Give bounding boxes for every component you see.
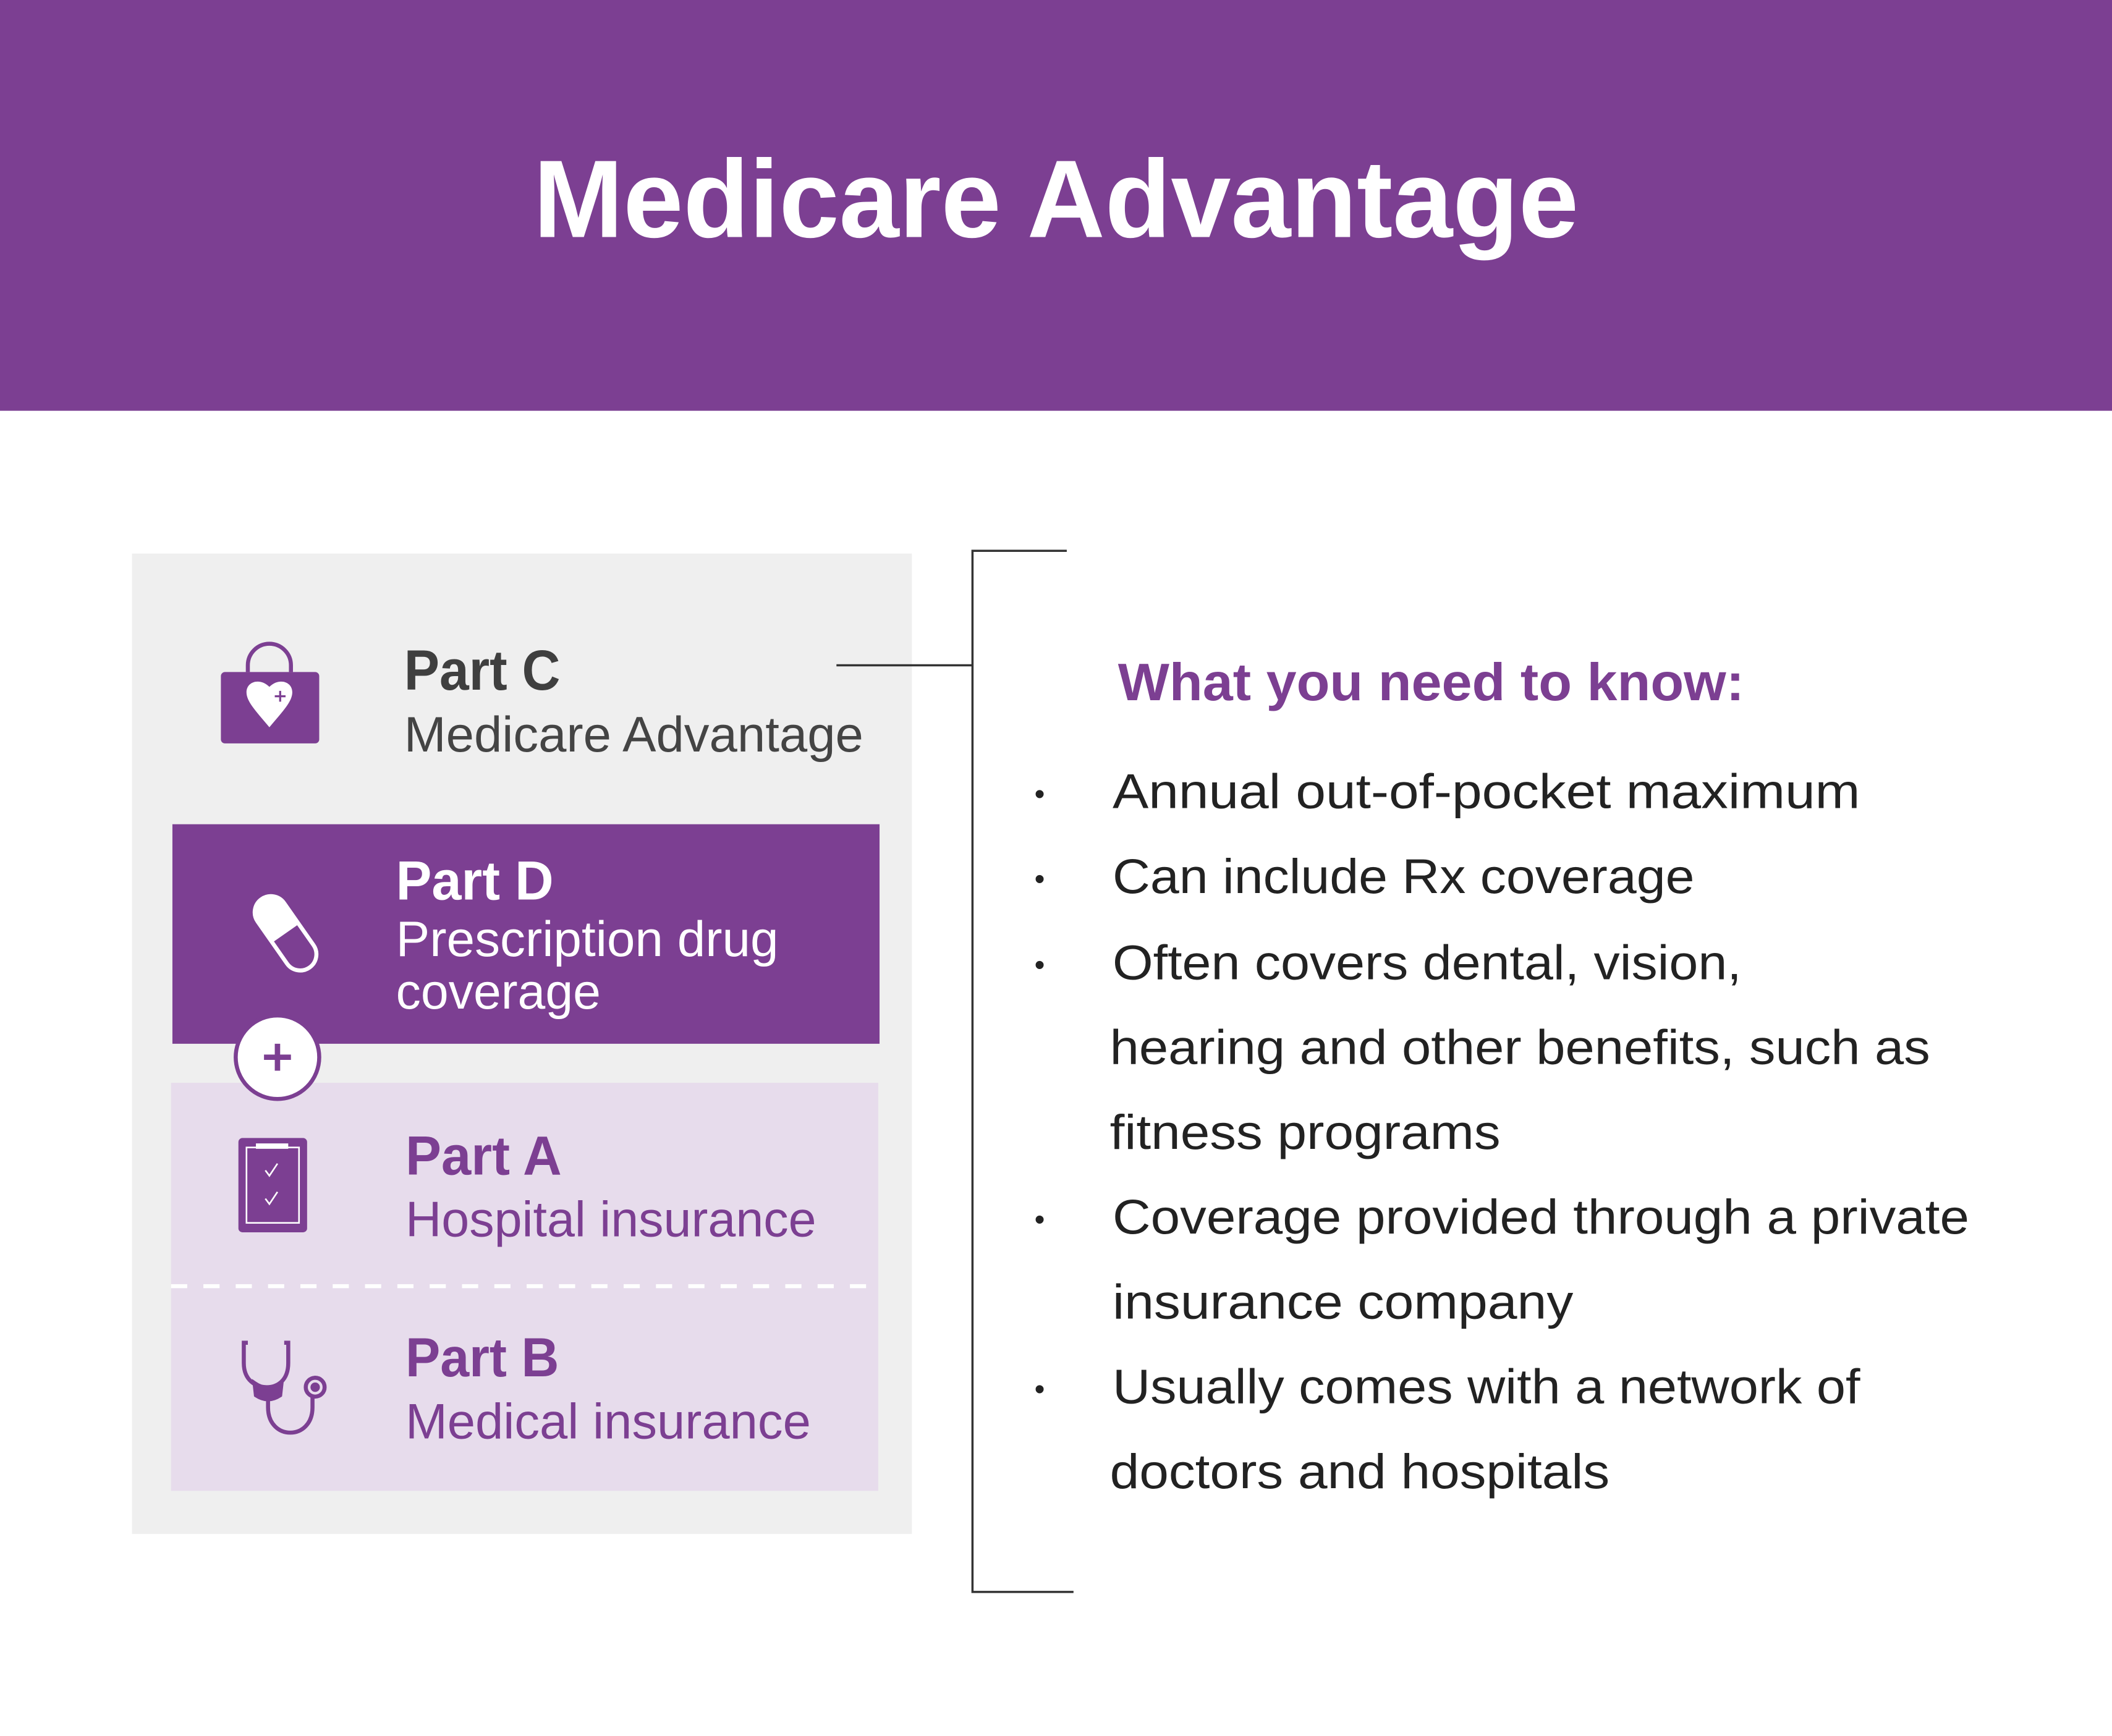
header banner	[0, 0, 2112, 411]
panel: part A and B: Part A	[405, 1124, 562, 1186]
title: Medicare Advantage	[533, 137, 1579, 261]
bullet list: •	[1035, 1373, 1045, 1406]
panel: what you need to know	[1035, 653, 1969, 1499]
panel: parts of medicare	[132, 554, 912, 1534]
bullet list: hearing and other benefits, such as	[1110, 1020, 1930, 1075]
bullet list: •	[1035, 1204, 1045, 1237]
icon: plus circle	[235, 1015, 319, 1099]
heading: What you need to know:	[1118, 653, 1744, 712]
bullet list: insurance company	[1113, 1274, 1574, 1329]
bullet list: Often covers dental, vision,	[1113, 935, 1742, 989]
bullet list	[1035, 764, 1969, 1499]
panel: part A and B	[171, 1083, 878, 1491]
panel: part D	[172, 824, 880, 1044]
panel: part D: Prescription drug	[396, 912, 779, 967]
text: part C: Medicare Advantage	[404, 707, 863, 763]
bullet list: Annual out-of-pocket maximum	[1113, 764, 1860, 819]
panel: part A and B: Part B	[405, 1326, 559, 1388]
panel: part A and B: Hospital insurance	[405, 1192, 816, 1248]
bullet list: Can include Rx coverage	[1113, 849, 1694, 904]
icon: stethoscope	[244, 1343, 324, 1433]
icon: clipboard	[239, 1138, 307, 1232]
panel: part D: Part D	[396, 850, 554, 912]
text: part C	[404, 639, 863, 763]
panel: part A and B: Medical insurance	[405, 1394, 811, 1449]
text: part C: Part C	[404, 639, 561, 702]
bullet list: doctors and hospitals	[1110, 1444, 1609, 1499]
bullet list: •	[1035, 863, 1045, 896]
bracket connector	[836, 551, 1074, 1592]
icon: pill	[248, 890, 323, 977]
icon: medical bag	[221, 644, 319, 743]
bullet list: Coverage provided through a private	[1113, 1190, 1969, 1244]
bullet list: •	[1035, 949, 1045, 982]
bullet list: Usually comes with a network of	[1113, 1360, 1860, 1414]
panel: part D: coverage	[396, 964, 601, 1020]
bullet list: fitness programs	[1110, 1105, 1501, 1159]
bullet list: •	[1035, 778, 1045, 811]
